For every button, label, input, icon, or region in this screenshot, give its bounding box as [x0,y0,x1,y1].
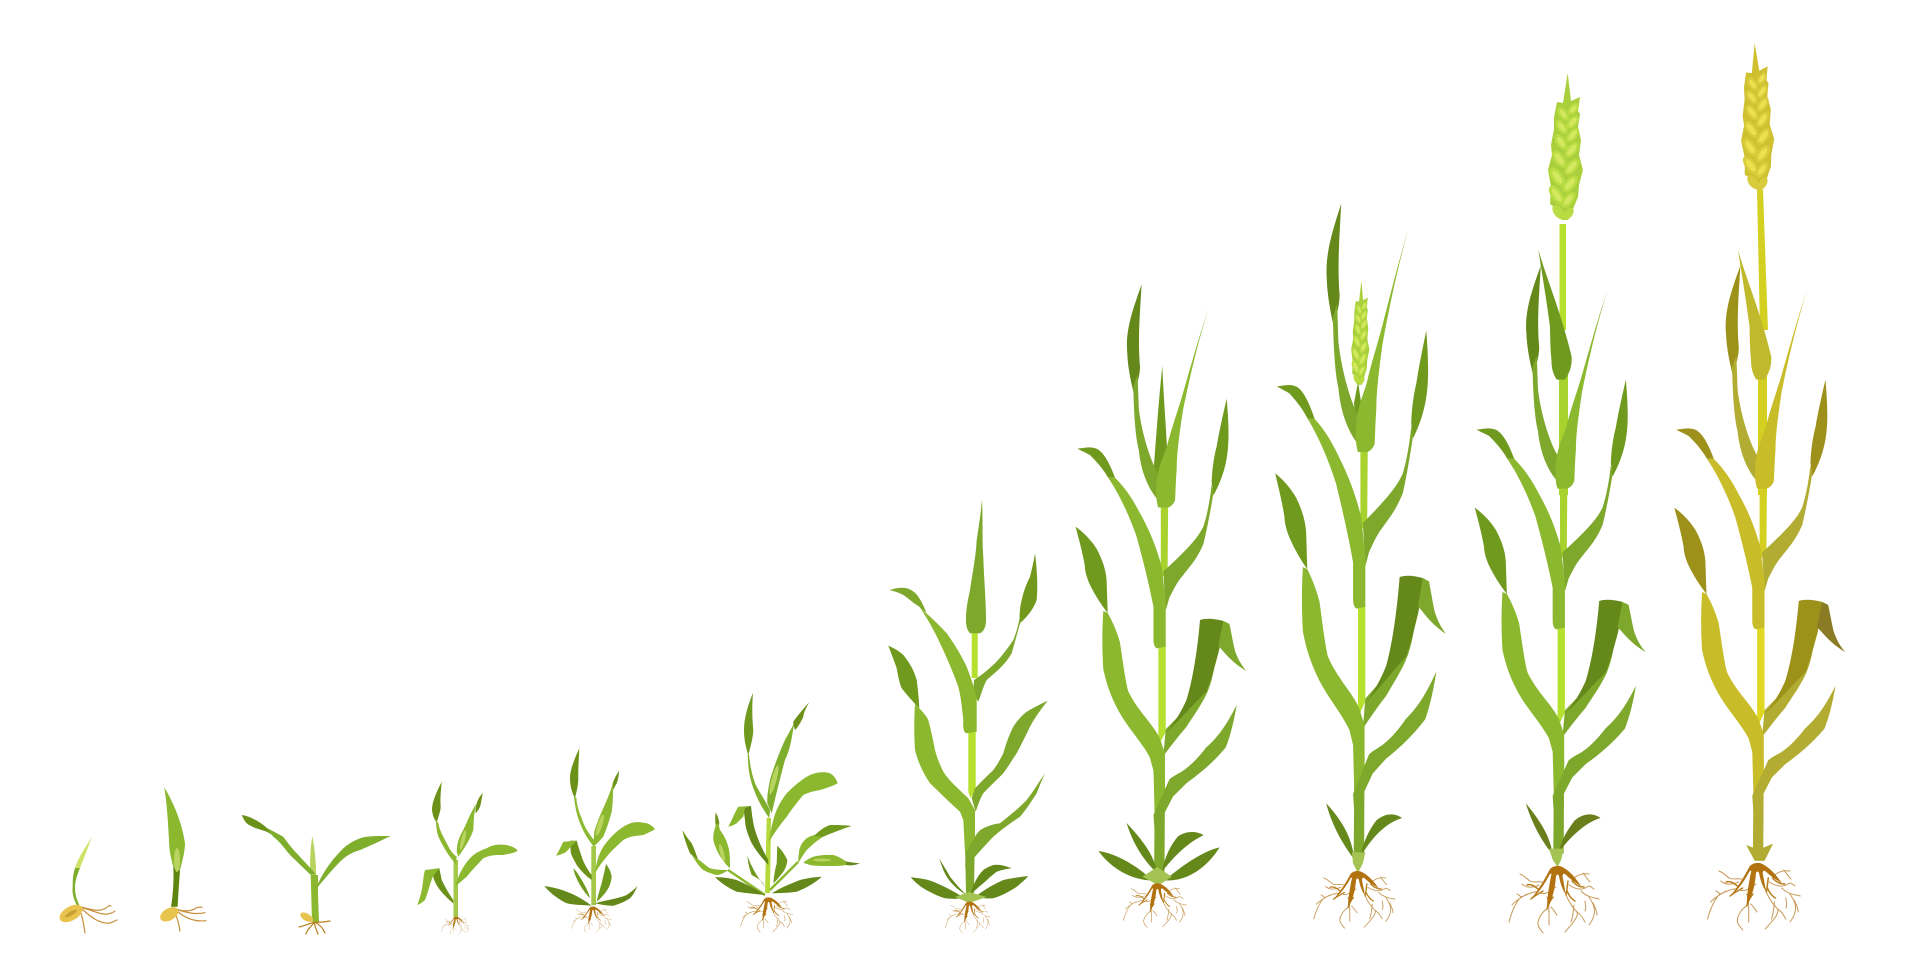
seed [57,901,85,926]
seed [299,911,315,924]
roots [1509,866,1599,933]
flag leaf [1738,249,1771,380]
central leaf [1354,382,1363,432]
leaves and stem [242,815,391,922]
plant stage 3: two leaves [242,815,391,934]
flag leaf [1538,249,1572,380]
upper stem [1758,370,1767,495]
first leaf [164,787,185,907]
leaves and stem [544,748,655,906]
ear stem [1757,190,1768,330]
ear stem [1560,224,1566,330]
basal leaves [911,858,1028,903]
lower left leaf [888,646,975,852]
plant stage 1: germinating seed [57,837,117,933]
plant stage 9: heading [1275,204,1446,928]
wheat ear [1734,42,1777,193]
right leaf [972,701,1048,812]
plant stage 2: first leaf [158,787,206,931]
main body of leaves and stem [1674,265,1845,853]
upper right leaf [973,553,1037,702]
basal leaves [1326,803,1402,873]
stem segments [965,630,978,893]
plant stage 7: stem elongation [888,499,1048,933]
roots [1314,871,1395,928]
roots [441,917,469,935]
plant stage 4: tillering start [417,782,518,935]
plant stage 10: green ear [1475,73,1646,933]
leaves and stem [417,782,518,917]
basal leaves [1098,823,1220,885]
roots [1708,863,1800,930]
lower right leaf [965,773,1045,867]
base crown [1746,844,1773,861]
main body of leaves and stem [1475,265,1646,853]
central leaf tip [1153,366,1167,502]
plant stage 11: ripe golden ear [1674,42,1845,930]
plant stage 6: full tillering [682,693,860,932]
stem and first shoot [72,837,92,905]
plant stage 5: tillering [544,748,655,933]
roots [299,921,330,934]
main body of leaves and stem [1275,204,1446,858]
seed [158,904,181,924]
plant stage 8: flag leaf [1076,284,1247,928]
wheat ear [1350,280,1369,386]
roots [175,907,206,931]
top leaf [966,499,986,633]
leaves and stem [682,693,860,895]
roots [945,901,990,933]
upper stem [1559,370,1568,495]
roots [1123,883,1186,928]
roots [740,897,793,932]
wheat ear [1546,73,1583,222]
upper left leaf [889,588,977,733]
roots [80,906,117,933]
basal leaves [1526,803,1600,867]
main body of leaves and stem [1076,284,1247,872]
roots [572,907,611,933]
